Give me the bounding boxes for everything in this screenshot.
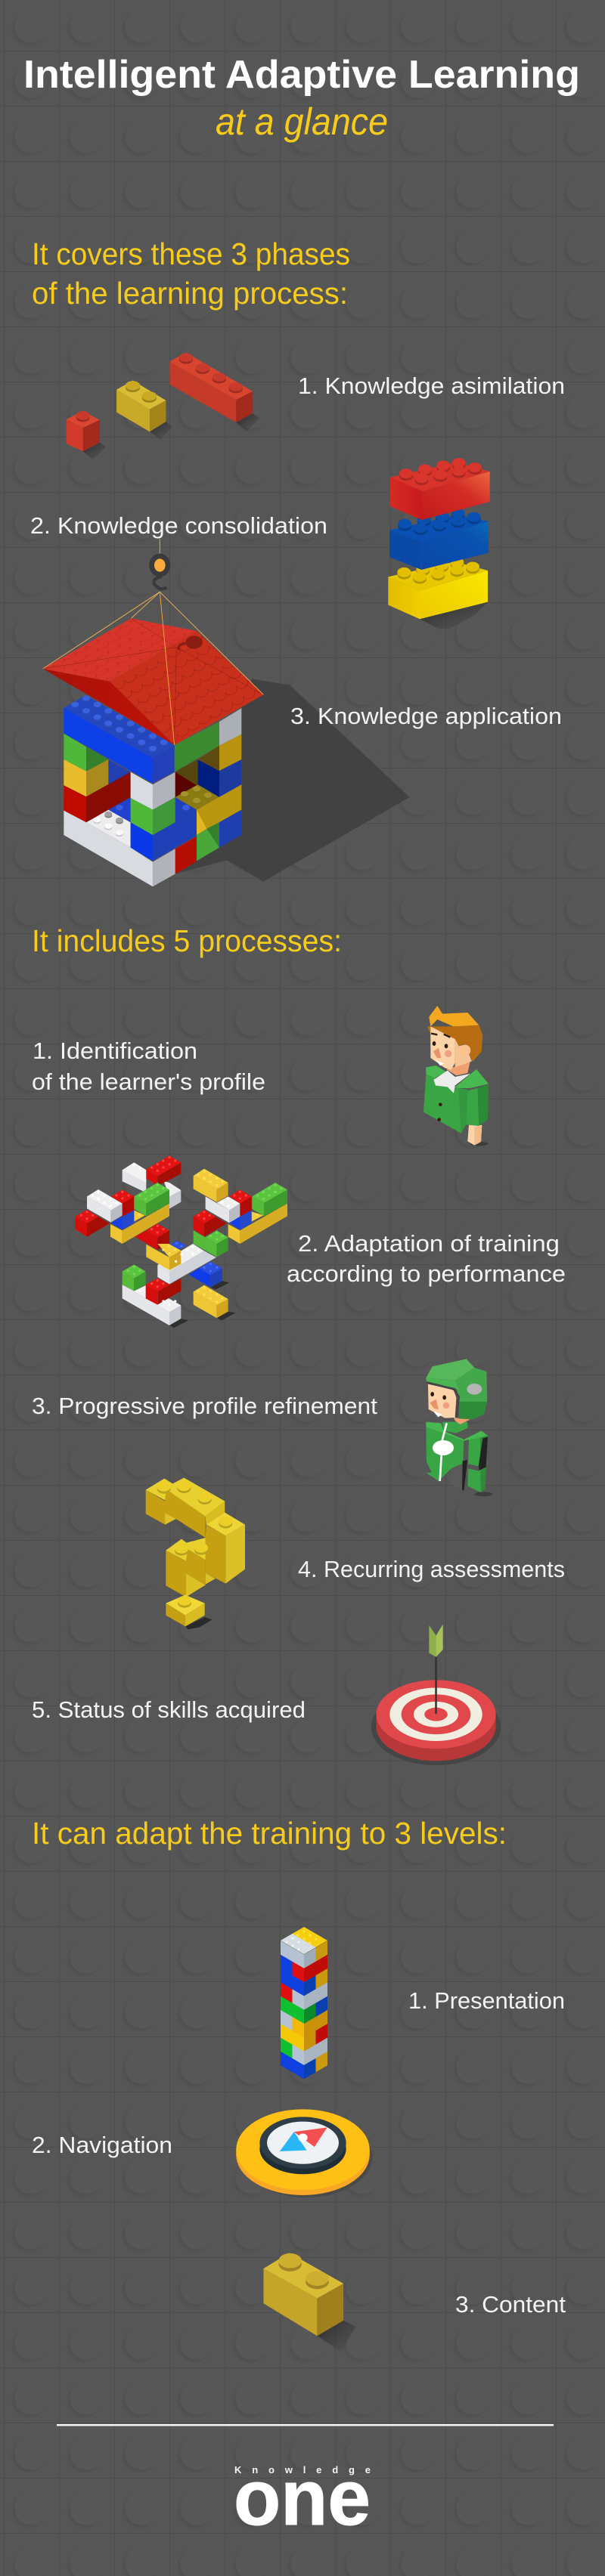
label: navigation: 2. Navigation — [32, 2132, 172, 2158]
label: recurring assessments: 4. Recurring assessments — [298, 1556, 565, 1582]
icon: scattered coloured bricks — [75, 1155, 287, 1328]
heading: processes: It includes 5 processes: — [32, 923, 342, 958]
footer divider — [57, 2424, 554, 2426]
label: status of skills: 5. Status of skills acquired — [32, 1696, 306, 1723]
heading: phases — [32, 237, 350, 311]
house shadow — [153, 679, 410, 886]
illustration: brick house with roof hanging from crane hook — [43, 539, 410, 886]
label: learner profile identification: of the learner's profile — [32, 1068, 265, 1095]
brick walls — [64, 695, 241, 886]
wall studs — [71, 695, 212, 837]
panel: learning phases — [30, 237, 565, 886]
logo: Knowledge One: one — [234, 2454, 371, 2542]
roof — [43, 618, 263, 745]
icon: isometric man in green jacket — [424, 1006, 489, 1146]
title block — [23, 53, 580, 143]
label: adaptation of training — [287, 1230, 566, 1287]
label: content: 3. Content — [455, 2291, 566, 2318]
label: knowledge assimilation: 1. Knowledge asimilation — [298, 373, 565, 399]
subtitle: at a glance — [216, 101, 388, 143]
panel: five processes — [32, 923, 566, 1765]
ropes — [43, 592, 263, 745]
icon: character in green helmet and suit — [426, 1359, 492, 1496]
icon: compass — [236, 2109, 372, 2197]
icon: target with arrow — [371, 1625, 501, 1765]
label: learner profile identification: 1. Identification — [33, 1038, 197, 1064]
heading: phases: It covers these 3 phases — [32, 237, 350, 271]
panel: three adaptation levels — [32, 1816, 566, 2352]
label: learner profile identification — [32, 1038, 265, 1095]
icon: yellow two-stud brick — [263, 2253, 355, 2352]
heading: levels: It can adapt the training to 3 levels: — [32, 1816, 507, 1851]
label: knowledge consolidation: 2. Knowledge consolidation — [30, 512, 327, 539]
icon: tall multi-colour brick tower — [281, 1927, 327, 2079]
brick shadows — [169, 1281, 236, 1328]
label: knowledge application: 3. Knowledge application — [290, 703, 562, 729]
crane hook — [152, 539, 168, 589]
label: adaptation of training: according to performance — [287, 1260, 566, 1287]
icon: stacked red blue yellow bricks — [388, 458, 490, 629]
logo: Knowledge One: Knowledge — [234, 2464, 371, 2475]
label: presentation: 1. Presentation — [408, 1987, 565, 2014]
icon: three separate red and yellow bricks — [67, 352, 259, 459]
icon: question mark made of bricks — [146, 1478, 245, 1629]
label: adaptation of training: 2. Adaptation of training — [298, 1230, 560, 1257]
brick studs — [81, 1158, 281, 1305]
heading: phases: of the learning process: — [32, 276, 348, 311]
title: Intelligent Adaptive Learning — [23, 53, 580, 97]
label: profile refinement: 3. Progressive profile refinement — [32, 1393, 377, 1419]
